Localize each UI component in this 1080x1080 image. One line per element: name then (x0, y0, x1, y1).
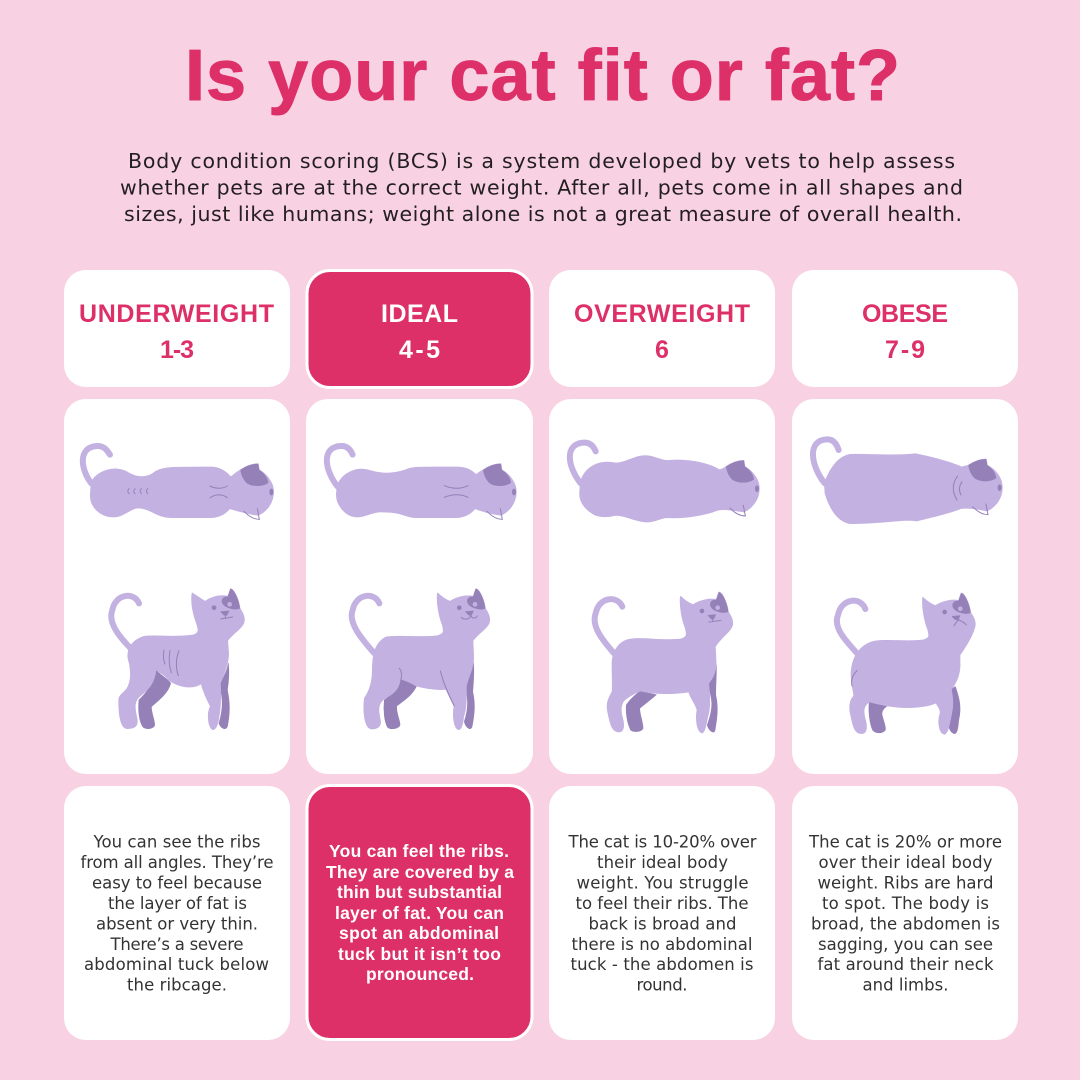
icon: obese cat from above (813, 439, 1002, 523)
panel: obese header: 7-9 (885, 336, 925, 364)
text block: underweight description: from all angles. They’re (80, 853, 274, 872)
text block: ideal description: spot an abdominal (339, 923, 499, 943)
text block: ideal description: They are covered by a (326, 862, 514, 882)
text block: obese description: to spot. The body is (822, 894, 989, 913)
text block: obese description: over their ideal body (818, 853, 993, 872)
text block: ideal description: tuck but it isn’t too (338, 944, 501, 964)
text block: overweight description: there is no abdominal (572, 935, 752, 954)
panel: obese illustrations (792, 399, 1018, 774)
text block: underweight description: abdominal tuck below (84, 955, 269, 974)
text block: ideal description: thin but substantial (337, 882, 502, 902)
text block: obese description (792, 786, 1018, 1040)
text block: overweight description: round. (636, 976, 688, 994)
panel: overweight header: 6 (655, 336, 669, 364)
text block: overweight description: back is broad and (588, 914, 736, 934)
icon: underweight cat from above (83, 446, 273, 519)
intro text: sizes, just like humans; weight alone is not a great measure of overall health. (124, 202, 962, 226)
text block: overweight description: to feel their ribs. The (576, 894, 748, 913)
text block: overweight description: tuck - the abdomen is (570, 955, 754, 974)
icon: ideal cat from the side (352, 589, 489, 729)
text block: underweight description (64, 786, 290, 1040)
text block: ideal description: pronounced. (366, 964, 474, 984)
text block: obese description: The cat is 20% or more (808, 832, 1002, 852)
icon: obese cat from the side (837, 593, 975, 734)
intro text (120, 149, 963, 226)
panel: ideal header (307, 270, 532, 388)
panel: ideal header: IDEAL (381, 300, 458, 328)
icon: ideal cat from above (327, 446, 516, 519)
text block: underweight description: the layer of fat is (108, 894, 247, 913)
text block: overweight description: weight. You struggle (576, 874, 748, 892)
intro text: Body condition scoring (BCS) is a system developed by vets to help assess (128, 149, 955, 173)
text block: obese description: broad, the abdomen is (811, 914, 1000, 934)
text block: obese description: fat around their neck (818, 955, 994, 974)
text block: obese description: and limbs. (862, 976, 948, 994)
panel: underweight header: 1-3 (160, 336, 194, 364)
panel: overweight header (549, 270, 775, 387)
text block: ideal description: You can feel the ribs. (329, 841, 509, 861)
text block: underweight description: absent or very thin. (96, 914, 258, 934)
panel: underweight illustrations (64, 399, 290, 774)
icon: overweight cat from the side (595, 592, 732, 733)
panel: underweight header (64, 270, 290, 387)
text block: underweight description: You can see the ribs (92, 832, 260, 852)
text block: overweight description: The cat is 10-20% over (568, 832, 757, 852)
panel: underweight header: UNDERWEIGHT (79, 300, 274, 328)
text block: overweight description: their ideal body (597, 853, 728, 872)
icon: overweight cat from above (570, 443, 759, 522)
title: Is your cat fit or fat? (185, 36, 900, 116)
panel: ideal header: 4-5 (399, 336, 440, 364)
text block: underweight description: the ribcage. (127, 976, 227, 994)
text block: underweight description: There’s a severe (110, 935, 244, 954)
text block: overweight description (549, 786, 775, 1040)
text block: obese description: weight. Ribs are hard (818, 874, 994, 892)
intro text: whether pets are at the correct weight. After all, pets come in all shapes and (120, 176, 963, 200)
panel: overweight illustrations (549, 399, 775, 774)
text block: ideal description: layer of fat. You can (335, 903, 504, 923)
panel: obese header (792, 270, 1018, 387)
icon: underweight cat from the side (111, 589, 244, 729)
text block: ideal description (307, 786, 532, 1040)
panel: obese header: OBESE (862, 300, 948, 328)
panel: overweight header: OVERWEIGHT (574, 300, 750, 328)
text block: obese description: sagging, you can see (818, 935, 993, 954)
text block: underweight description: easy to feel because (92, 874, 262, 892)
panel: ideal illustrations (306, 399, 533, 774)
